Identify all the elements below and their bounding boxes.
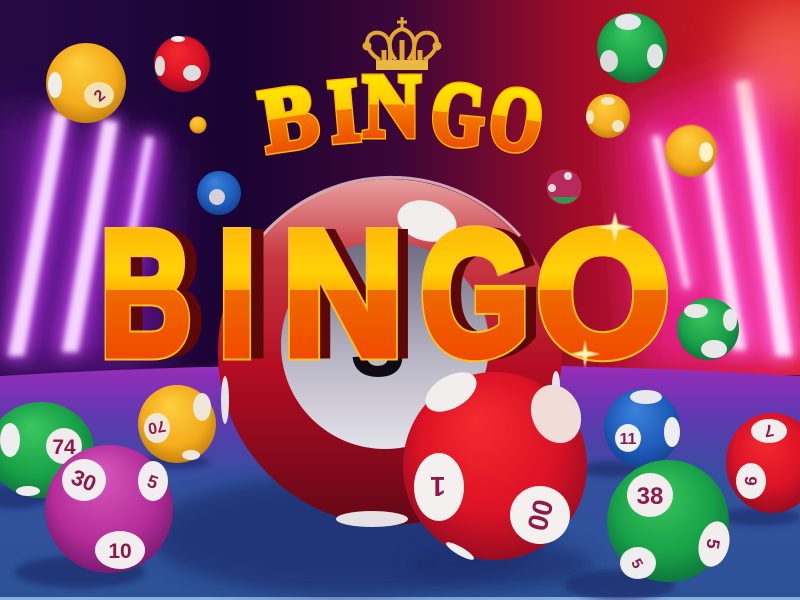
ball: magenta: 10 [108,540,132,563]
sparkles [570,212,632,368]
ball: yellow right [665,125,717,177]
ball: orange left floor [138,385,216,463]
ball: green top right [597,13,667,83]
floor [0,364,800,600]
ball: red front: 00 [521,496,559,534]
main title: BINGO: B [100,194,192,393]
small title: BINGO [254,56,550,173]
ball: green left floor [0,402,94,498]
ball: blue [197,171,241,215]
main title: BINGO: G [420,194,530,393]
main title: BINGO: G [432,194,542,393]
ball: red right floor: 9 [741,475,760,487]
main title: BINGO: B [100,194,192,393]
main title: BINGO: B [113,194,205,393]
ball: red front: 1 [430,471,446,502]
ball: yellow top left: 2 [91,87,109,106]
ball: red right floor: 7 [763,420,775,441]
ball: tiny gold [190,116,206,134]
ball: blue right floor [604,389,680,467]
small title: BINGO: O [483,66,550,173]
main title: BINGO: I [218,194,256,393]
ball: yellow top left [46,43,126,123]
small title: BINGO: I [325,61,363,162]
ball: blue right floor: 11 [620,431,637,448]
main title: BINGO: N [294,194,416,393]
ball: green right front: 5 [702,537,724,550]
small title: BINGO: N [363,56,420,156]
main title: BINGO: O [536,194,670,393]
crown icon [364,17,440,70]
ball: red top [154,36,210,92]
floor shadows [0,455,800,600]
small title: BINGO: B [254,64,325,172]
ball: green right front: 5 [627,556,646,572]
small title: BINGO: N [363,56,420,156]
background wall [0,0,800,375]
small title: BINGO: G [427,63,489,167]
ball: orange left floor: 70 [146,417,167,436]
ball: giant red with number [218,177,562,527]
ball: giant red with number: 3 [350,286,406,398]
small title: BINGO: G [427,63,489,167]
ball: red front [403,364,590,562]
ball: green right front [607,460,734,582]
ball: red right floor [726,413,800,513]
left neon light bars [0,108,170,370]
right neon light bars [620,0,800,370]
ball: magenta [45,445,173,573]
ball: green right mid [677,298,739,360]
main title: BINGO: I [232,194,270,393]
ball: magenta: 5 [145,471,161,493]
small title: BINGO: B [254,64,325,172]
main title: BINGO: O [536,194,670,393]
ball: magenta: 30 [68,464,100,497]
ball: green left floor: 74 [52,436,76,459]
ball: small pink green [546,170,582,204]
main title: BINGO: G [420,194,530,393]
main title: BINGO: N [282,194,404,393]
main title: BINGO: I [218,194,256,393]
small title: BINGO: O [483,66,550,173]
ball: green right front: 38 [637,483,663,510]
small title: BINGO: I [325,61,363,162]
main title: BINGO: N [282,194,404,393]
main title: BINGO [100,194,670,393]
ball: orange right [586,94,630,138]
